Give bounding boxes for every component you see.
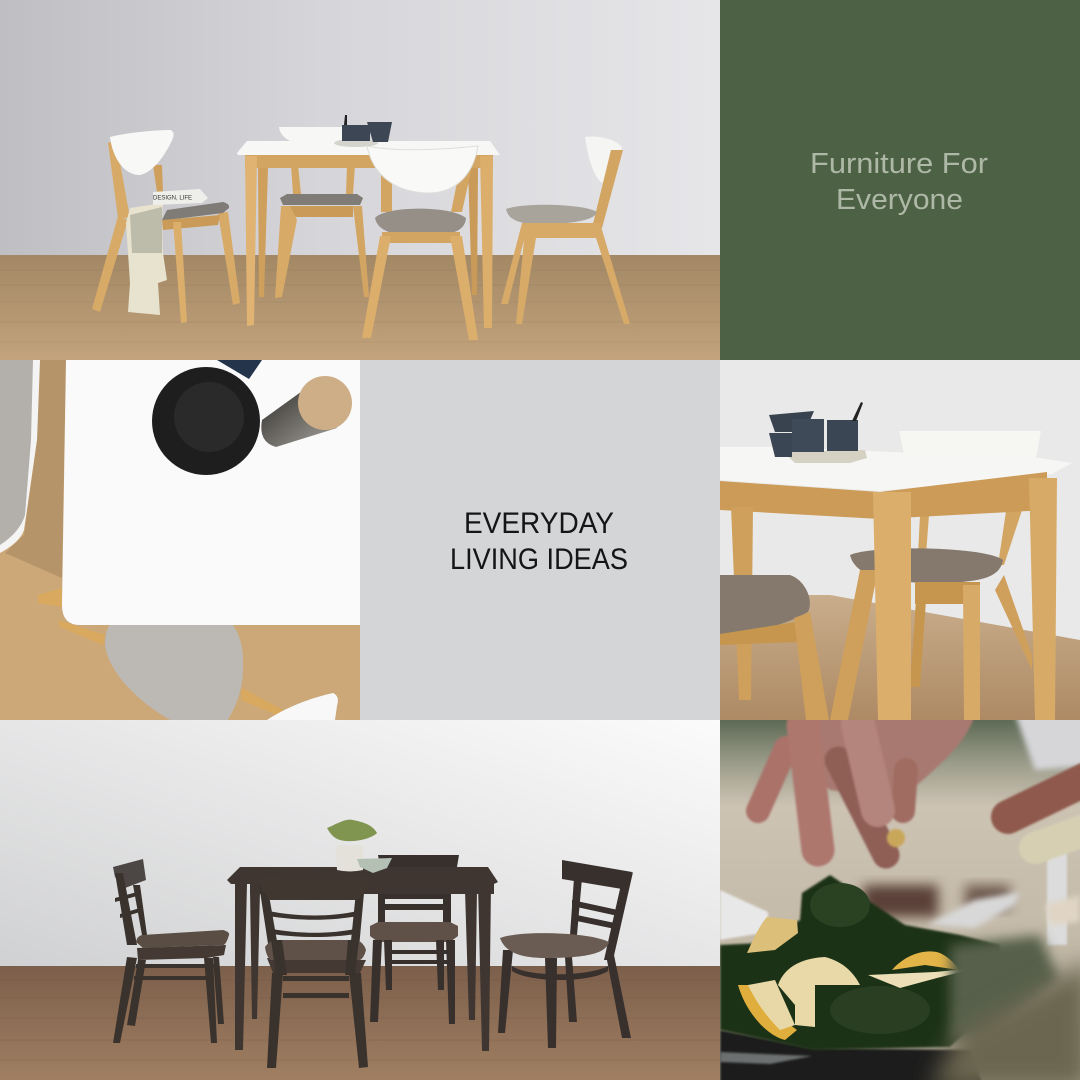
panel: grey text block [360, 360, 720, 720]
icon: chair right [501, 137, 630, 324]
icon: right chair [498, 860, 633, 1048]
panel: light wood dining set photo [0, 0, 720, 360]
icon: blue tile [217, 360, 262, 379]
icon: dishes [769, 402, 867, 463]
panel: cooking close-up photo [720, 700, 1080, 1080]
icon: seat cushion left [0, 360, 40, 553]
heading: Everyday Living Ideas [450, 507, 628, 576]
heading: Furniture For Everyone: Furniture For [810, 148, 988, 180]
icon: white table top [62, 360, 360, 625]
icon: dishes on table [334, 115, 392, 147]
icon: black ribbed plate [152, 367, 260, 475]
icon: table with white top [237, 141, 500, 328]
heading: Furniture For Everyone: Everyone [836, 184, 963, 216]
icon: left chair with throw and book [92, 130, 240, 323]
icon: rear chair [370, 855, 459, 1024]
icon: front chair seat [720, 575, 829, 720]
icon: plant vase and bowl [327, 820, 392, 873]
icon: cylinder jar with wood lid [261, 376, 352, 447]
panel: table detail photo [720, 360, 1080, 720]
icon: chair front center [362, 146, 478, 340]
book title: DESIGN, LIFE [153, 196, 192, 202]
panel: dark wood dining set photo [0, 720, 720, 1080]
icon: blurred background objects [720, 700, 1080, 945]
icon: white table top and apron [720, 447, 1072, 720]
icon: lemon slices [738, 917, 977, 1040]
icon: dark pan [720, 1030, 985, 1080]
heading: Everyday Living Ideas: LIVING IDEAS [450, 543, 628, 576]
icon: left chair [113, 859, 229, 1043]
icon: hand left [758, 700, 978, 855]
icon: white chair back [267, 693, 338, 720]
icon: broccoli greens pile [720, 875, 1000, 1050]
icon: blurred foreground [930, 935, 1080, 1080]
icon: chair legs [38, 588, 283, 715]
heading: Furniture For Everyone [810, 148, 988, 216]
icon: dark table [227, 867, 498, 1051]
icon: chair behind table [275, 127, 369, 298]
icon: front chair [260, 894, 368, 1068]
icon: hand right [1008, 775, 1080, 848]
panel: green title block [720, 0, 1080, 360]
panel: overhead table photo [0, 360, 360, 720]
icon: seat cushion bottom [105, 625, 243, 720]
heading: Everyday Living Ideas: EVERYDAY [464, 507, 614, 540]
icon: rear chair [830, 431, 1041, 720]
